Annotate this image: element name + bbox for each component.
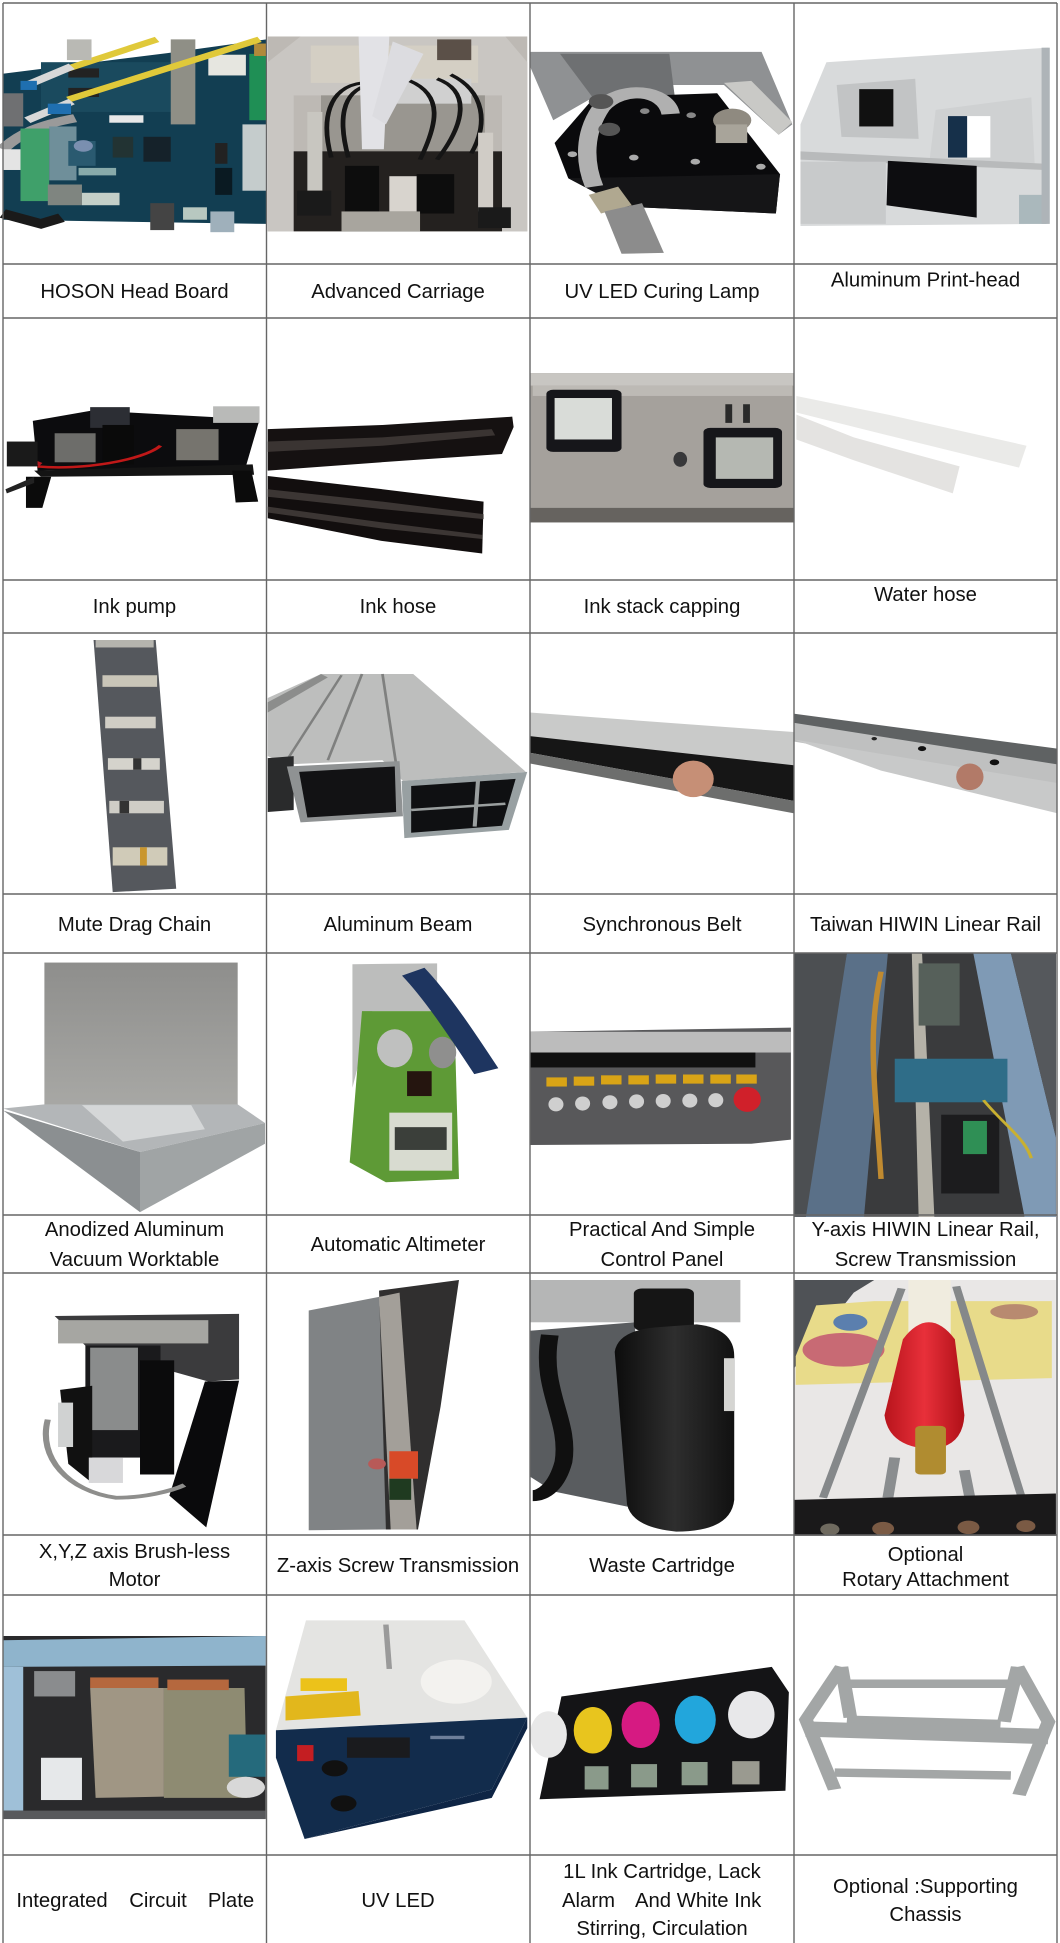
panel: Automatic Altimeter xyxy=(311,963,486,1256)
panel: Advanced Carriage xyxy=(268,36,527,303)
panel: Ink pump xyxy=(5,406,260,618)
photo: ink hoses xyxy=(268,417,514,553)
panel: Waste Cartridge xyxy=(530,1280,740,1577)
label: Integrated xyxy=(16,1890,108,1912)
panel: Optional Supporting Chassis xyxy=(806,1667,1048,1926)
label: Aluminum Beam xyxy=(324,914,472,936)
panel: HOSON Head Board xyxy=(3,39,266,303)
label: Mute Drag Chain xyxy=(58,914,211,936)
photo: curing lamp xyxy=(530,52,792,254)
photo: vacuum worktable xyxy=(3,963,265,1212)
panel: Practical And Simple Control Panel xyxy=(530,1028,791,1271)
label: 1L Ink Cartridge, Lack xyxy=(563,1861,762,1883)
panel: UV LED Curing Lamp xyxy=(530,52,792,303)
panel: Optional Rotary Attachment xyxy=(794,1280,1056,1591)
label: Advanced Carriage xyxy=(311,281,485,303)
photo: carriage xyxy=(268,36,527,231)
panel: UV LED xyxy=(276,1620,527,1912)
photo: altimeter sensor xyxy=(350,963,486,1182)
panel: Integrated Circuit Plate xyxy=(3,1636,266,1912)
photo: UV LED unit xyxy=(276,1620,527,1839)
panel: Taiwan HIWIN Linear Rail xyxy=(794,714,1057,936)
label: Ink pump xyxy=(93,596,176,618)
label: Ink hose xyxy=(360,596,436,618)
photo: rotary attachment xyxy=(794,1280,1056,1536)
label xyxy=(562,1861,762,1940)
label: Optional xyxy=(888,1544,963,1566)
label: Aluminum Print-head xyxy=(831,270,1020,292)
panel: Anodized Aluminum Vacuum Worktable xyxy=(3,963,265,1271)
label: Synchronous Belt xyxy=(583,914,742,936)
panel: 1L Ink Cartridge xyxy=(530,1667,789,1940)
label line 2: Motor xyxy=(109,1569,161,1591)
label xyxy=(833,1876,1018,1926)
label: Water hose xyxy=(874,584,977,606)
photo: synchronous belt xyxy=(530,713,794,813)
label: X,Y,Z axis Brush-less xyxy=(39,1541,230,1563)
label line 2: Control Panel xyxy=(601,1249,723,1271)
panel: Ink hose xyxy=(268,417,514,618)
photo: aluminum beams xyxy=(268,674,527,838)
label: Ink stack capping xyxy=(584,596,740,618)
panel: Aluminum Print-head xyxy=(800,48,1050,292)
photo: linear rail xyxy=(794,714,1057,813)
label line 2: Vacuum Worktable xyxy=(50,1249,219,1271)
label: UV LED Curing Lamp xyxy=(564,281,760,303)
label line 2: Screw Transmission xyxy=(835,1249,1016,1271)
panel: Aluminum Beam xyxy=(268,674,527,936)
panel: Mute Drag Chain xyxy=(58,640,211,936)
label: Automatic Altimeter xyxy=(311,1234,486,1256)
label: Circuit xyxy=(129,1890,187,1912)
panel: Ink stack capping xyxy=(530,373,794,618)
label line 2: Rotary Attachment xyxy=(842,1569,1009,1591)
photo: drag chain xyxy=(94,640,176,892)
photo: circuit plate xyxy=(3,1636,266,1819)
photo: aluminum print-head frame xyxy=(800,48,1050,226)
photo: water hoses xyxy=(796,396,1027,493)
photo: ink cartridges xyxy=(530,1667,789,1799)
label: Alarm xyxy=(562,1890,615,1912)
label: Z-axis Screw Transmission xyxy=(277,1555,519,1577)
photo: head board xyxy=(3,39,266,232)
photo: control panel xyxy=(530,1028,791,1145)
panel: Synchronous Belt xyxy=(530,713,794,936)
label: Optional :Supporting xyxy=(833,1876,1018,1898)
label: Taiwan HIWIN Linear Rail xyxy=(810,914,1041,936)
panel: Y-axis HIWIN Linear Rail, Screw Transmission xyxy=(794,953,1056,1271)
photo: z-axis screw xyxy=(309,1280,459,1530)
photo: y-axis internals xyxy=(794,953,1056,1217)
photo: supporting chassis frame xyxy=(806,1667,1048,1795)
label: Plate xyxy=(208,1890,254,1912)
label: HOSON Head Board xyxy=(40,281,229,303)
label: UV LED xyxy=(361,1890,435,1912)
label: Waste Cartridge xyxy=(589,1555,735,1577)
label: Stirring, Circulation xyxy=(576,1918,748,1940)
label: And White Ink xyxy=(635,1890,762,1912)
photo: capping station xyxy=(530,373,794,522)
label: Practical And Simple xyxy=(569,1219,755,1241)
label: Anodized Aluminum xyxy=(45,1219,224,1241)
photo: waste cartridge xyxy=(530,1280,740,1532)
panel: Z-axis Screw Transmission xyxy=(277,1280,519,1577)
label: Y-axis HIWIN Linear Rail, xyxy=(811,1219,1040,1241)
label: Chassis xyxy=(889,1904,962,1926)
photo: ink pump xyxy=(5,406,260,508)
panel: Water hose xyxy=(796,396,1027,606)
panel: X,Y,Z axis Brush-less Motor xyxy=(39,1314,239,1591)
label xyxy=(16,1890,254,1912)
photo: brushless motor xyxy=(46,1314,239,1527)
